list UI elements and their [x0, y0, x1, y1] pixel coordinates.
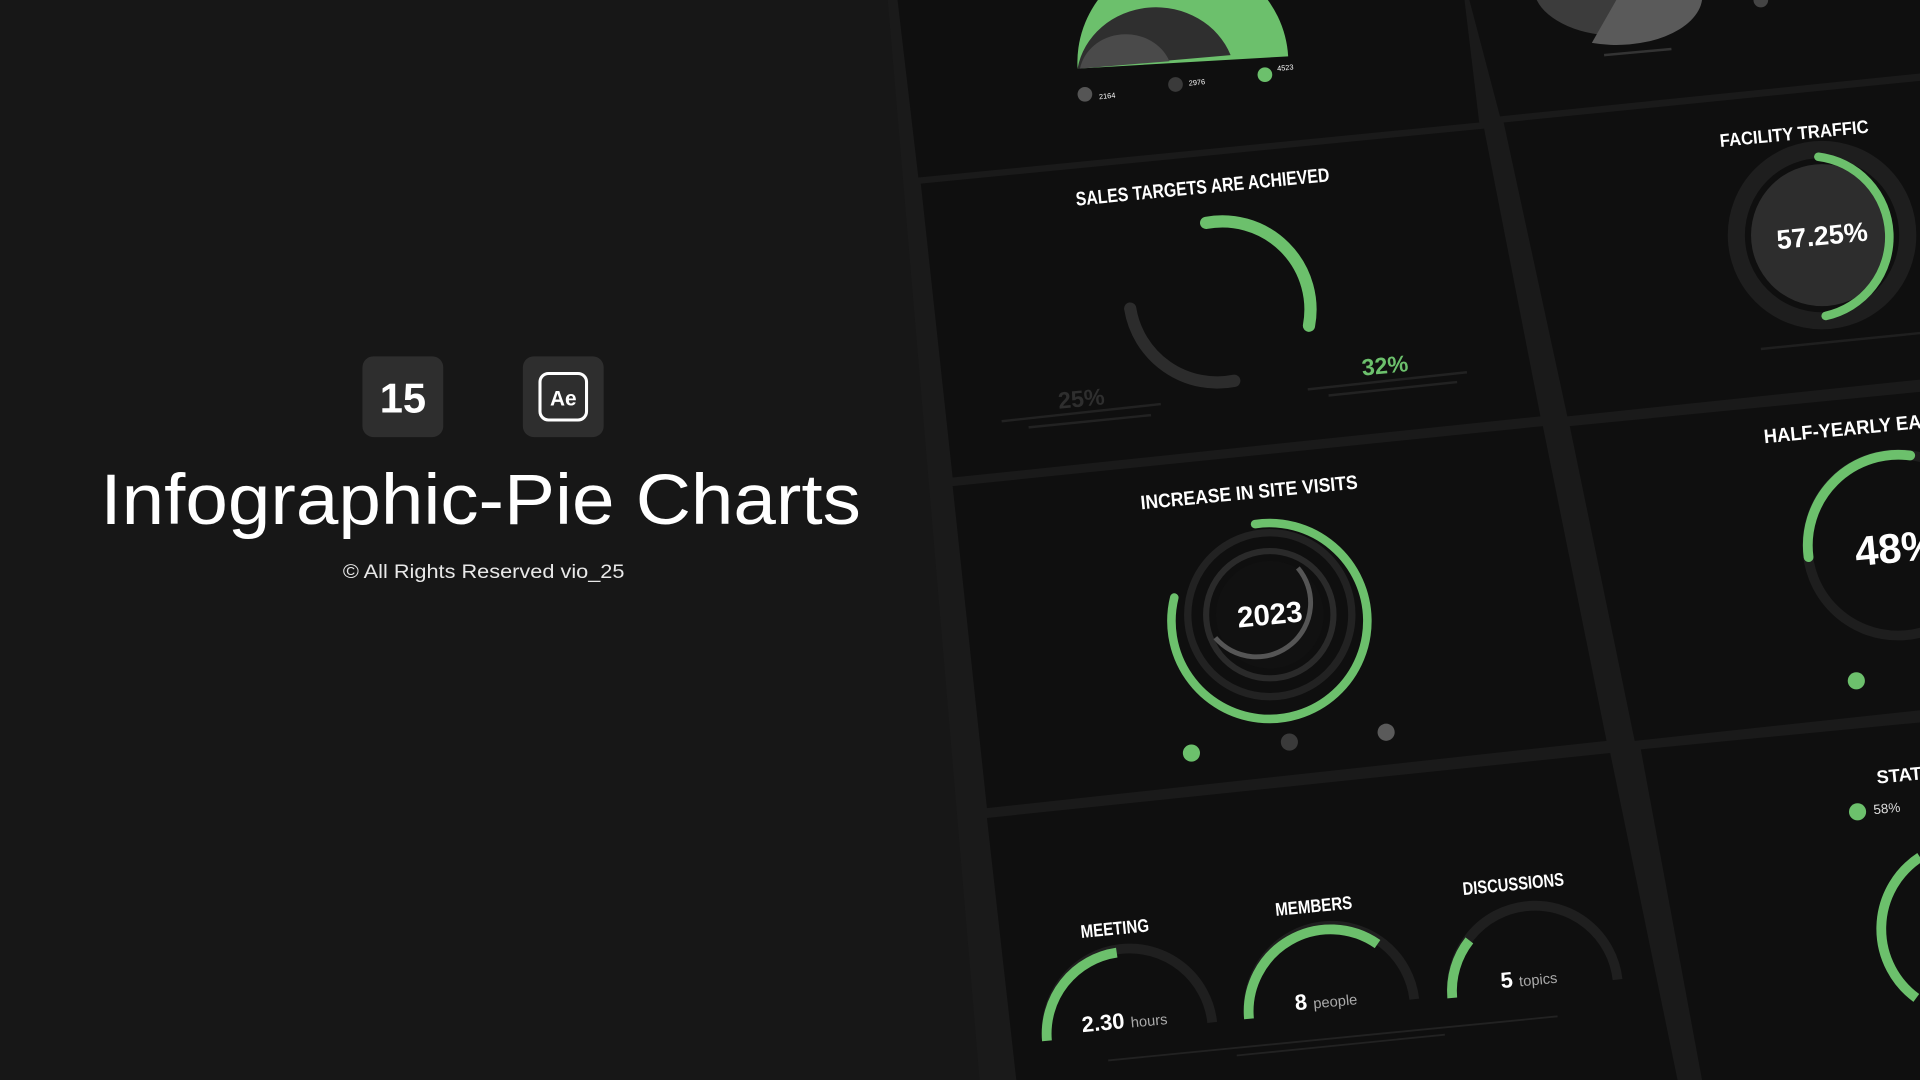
panel A: [898, 0, 1479, 178]
panel F: facility traffic: [1504, 81, 1920, 416]
arc green: [1206, 221, 1310, 326]
ring green: [1171, 523, 1367, 719]
panel A: 2164: [1099, 91, 1116, 101]
panel B: sales targets: 25%: [1057, 383, 1106, 414]
panel C: site visits: 2023: [1236, 595, 1304, 635]
panel B: sales targets: [921, 129, 1540, 478]
panel C: site visits: [953, 426, 1607, 808]
panel D: meeting/members/discussions: 5 topics: [1499, 963, 1558, 993]
panel D: meeting/members/discussions: MEETING: [1080, 914, 1150, 942]
title: Infographic-Pie Charts: [100, 461, 861, 540]
heading: SALES TARGETS ARE ACHIEVED: [1075, 164, 1330, 211]
panel A: 4523: [1277, 62, 1294, 73]
subtitle: © All Rights Reserved vio_25: [343, 561, 625, 583]
badge: 15: 15: [380, 375, 426, 422]
panel F: facility traffic: 57.25%: [1775, 217, 1869, 255]
badge: 15: [362, 356, 443, 437]
heading: INCREASE IN SITE VISITS: [1140, 472, 1359, 514]
panel H: statistics: 58%: [1873, 800, 1901, 817]
panel D: meeting/members/discussions: 2.30 hours: [1081, 1004, 1168, 1037]
panel D: meeting/members/discussions: [987, 753, 1678, 1080]
panel H: statistics: [1641, 722, 1920, 1080]
badge: Ae: Ae: [550, 387, 577, 410]
panel E: [1469, 0, 1920, 116]
panel A: 2976: [1188, 77, 1205, 88]
badge: Ae: [523, 356, 604, 437]
panel D: meeting/members/discussions: DISCUSSIONS: [1462, 868, 1565, 899]
panel B: sales targets: 32%: [1361, 350, 1410, 381]
panel D: meeting/members/discussions: MEMBERS: [1274, 892, 1353, 920]
panel G: half-yearly: [1570, 392, 1920, 741]
arc gray: [1130, 309, 1234, 382]
panel F: facility traffic: FACILITY TRAFFIC: [1719, 116, 1869, 151]
panel D: meeting/members/discussions: 8 people: [1294, 984, 1358, 1015]
right backdrop: [888, 0, 1920, 1080]
